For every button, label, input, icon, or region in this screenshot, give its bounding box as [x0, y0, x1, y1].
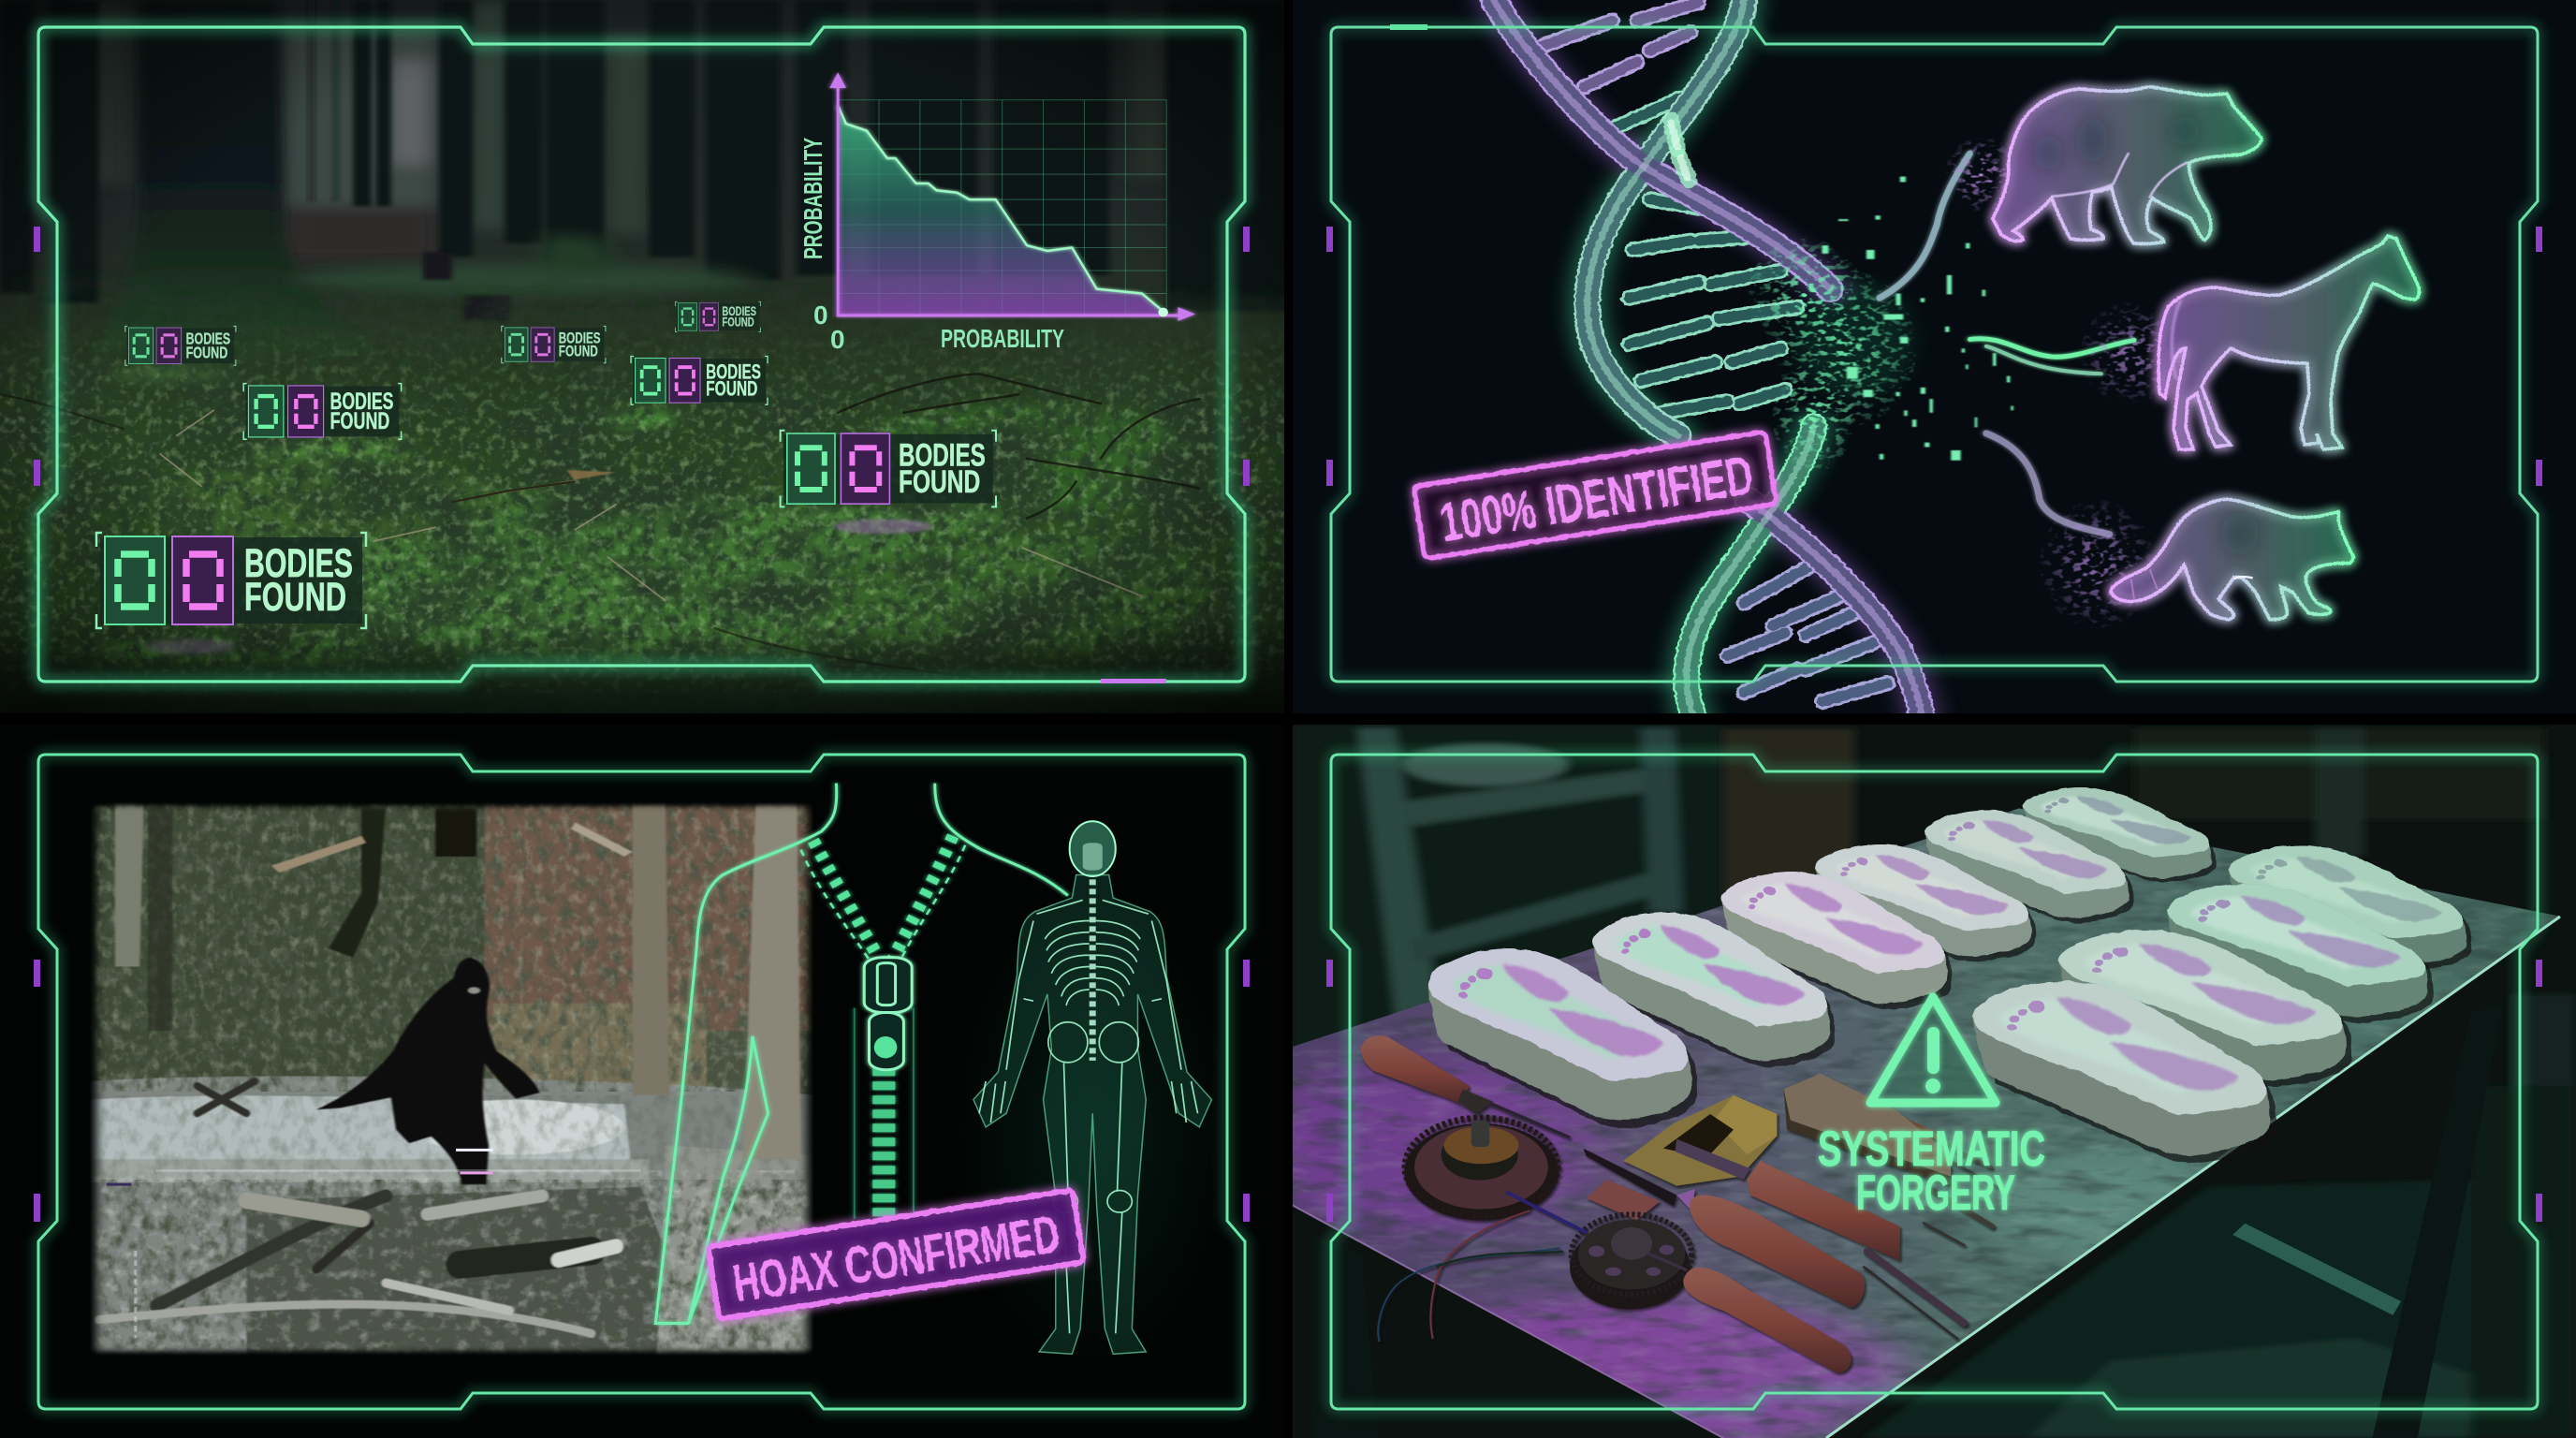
counter: bodies found, farthest [676, 301, 760, 331]
counter: bodies found, mid left: BODIES [330, 389, 393, 415]
footprint casts [1427, 787, 2471, 1163]
panel: forest floor with zero bodies found [0, 0, 1284, 713]
warning triangle [1870, 997, 1996, 1103]
counter: bodies found, mid left [243, 384, 402, 439]
gear: right [1570, 1214, 1691, 1309]
helix rungs [1543, 2, 1888, 701]
counter: bodies found, mid left: FOUND [330, 408, 389, 434]
skeleton figure [953, 821, 1232, 1371]
chart: probability curve [798, 72, 1195, 354]
bright rung segments near crossing [1671, 120, 1689, 180]
jacket outline [655, 784, 1068, 1324]
wires [1506, 1192, 1587, 1233]
animal: bear [1993, 87, 2261, 243]
counter: bodies found, foreground: FOUND [244, 575, 346, 620]
cast 9 [2058, 930, 2352, 1087]
cast 1 [1427, 948, 1697, 1128]
cast 7 [2229, 845, 2471, 972]
cast 5 [1925, 810, 2133, 923]
table legs [1312, 1004, 2504, 1438]
cast 8 [2167, 884, 2434, 1022]
counter: bodies found, far left: BODIES [186, 330, 230, 348]
panel: bigfoot film frame with suit zipper and skeleton [0, 725, 1284, 1438]
helix strands [1493, 0, 1923, 719]
chisel handle: upper [1747, 1161, 1900, 1261]
cast 3 [1721, 872, 1952, 1009]
cast 2 [1593, 912, 1835, 1067]
panel: DNA breaking into animals [1293, 0, 2576, 719]
counter: bodies found, foreground [96, 533, 366, 628]
label: systematic forgery: SYSTEMATIC [1818, 1122, 2045, 1177]
counter: bodies found, right: BODIES [899, 437, 986, 473]
chisel handle: lower [1647, 1253, 1687, 1270]
counter: bodies found, foreground: BODIES [244, 541, 353, 586]
chart grid [838, 100, 1166, 315]
zipper [801, 836, 965, 1219]
bigfoot figure [316, 958, 540, 1184]
chart area [838, 106, 1164, 315]
gear: left [1404, 1118, 1559, 1220]
counter: bodies found, mid right: FOUND [706, 377, 757, 401]
stamp: hoax confirmed [708, 1190, 1084, 1319]
counter: bodies found, farthest: FOUND [722, 315, 754, 329]
workshop background [1292, 725, 2576, 1438]
counter: bodies found, mid right [631, 357, 768, 404]
HUD frame: panel 3 [34, 755, 1250, 1409]
chart line [838, 106, 1164, 313]
animal: raccoon [2111, 499, 2353, 620]
stream to bear [1880, 138, 2019, 298]
label: systematic forgery [1818, 1122, 2045, 1221]
chart labels: 0 [813, 301, 828, 330]
chisel blade and block [1583, 1149, 1676, 1206]
stamp: 100% identified [1413, 432, 1777, 559]
cast 10 [1972, 981, 2276, 1163]
HUD frame: panel 2 [1326, 24, 2542, 682]
chart labels: PROBABILITY [941, 324, 1064, 353]
chisel handle: large [1676, 1189, 1695, 1211]
stamp: hoax confirmed: HOAX CONFIRMED [729, 1204, 1064, 1314]
wood handle blocks [1784, 1074, 1951, 1177]
table surface wear [1292, 808, 2560, 1438]
chart labels: 0 [830, 325, 845, 354]
stream to horse [1969, 302, 2179, 404]
counter: bodies found, far left: FOUND [186, 343, 227, 361]
big trunk [114, 2, 315, 330]
chisel handle: rear [1361, 1035, 1470, 1103]
tools: gears, blocks, chisels and wires [1361, 1035, 2001, 1373]
stream to raccoon [1986, 433, 2155, 628]
chisels behind warning sign [1857, 1105, 2001, 1339]
label: systematic forgery: FORGERY [1856, 1166, 2015, 1221]
vignette [0, 0, 1284, 713]
chart labels: PROBABILITY [798, 138, 827, 259]
moss texture [26, 300, 1284, 669]
counter: bodies found, mid right: BODIES [706, 360, 761, 383]
forest photo background [0, 0, 1284, 713]
HUD frame: panel 4 [1326, 755, 2542, 1409]
counter: bodies found, far centre [502, 326, 606, 363]
counter: bodies found, right: FOUND [899, 464, 980, 500]
animal: horse [2159, 236, 2419, 449]
DNA helix [1493, 0, 1923, 719]
panel: plaster footprint casts on workbench [1255, 725, 2576, 1438]
counter: bodies found, far centre: FOUND [559, 342, 598, 360]
film still photo [91, 801, 813, 1357]
counter: bodies found, far left [125, 326, 236, 365]
HUD frame: panel 1 [34, 27, 1250, 683]
chart labels [798, 138, 1064, 354]
wood block [1623, 1095, 1777, 1186]
counter: bodies found, right [781, 431, 996, 506]
chart axes [829, 72, 1195, 321]
cast 6 [2023, 787, 2216, 882]
counter: bodies found, far centre: BODIES [559, 330, 601, 347]
scan glitch lines [107, 1150, 641, 1338]
cast 4 [1815, 844, 2036, 961]
fracture cloud [1748, 177, 2013, 472]
counter: bodies found, farthest: BODIES [722, 304, 756, 318]
stamp: 100% identified: 100% IDENTIFIED [1436, 445, 1758, 554]
helix glow [1493, 0, 1923, 719]
